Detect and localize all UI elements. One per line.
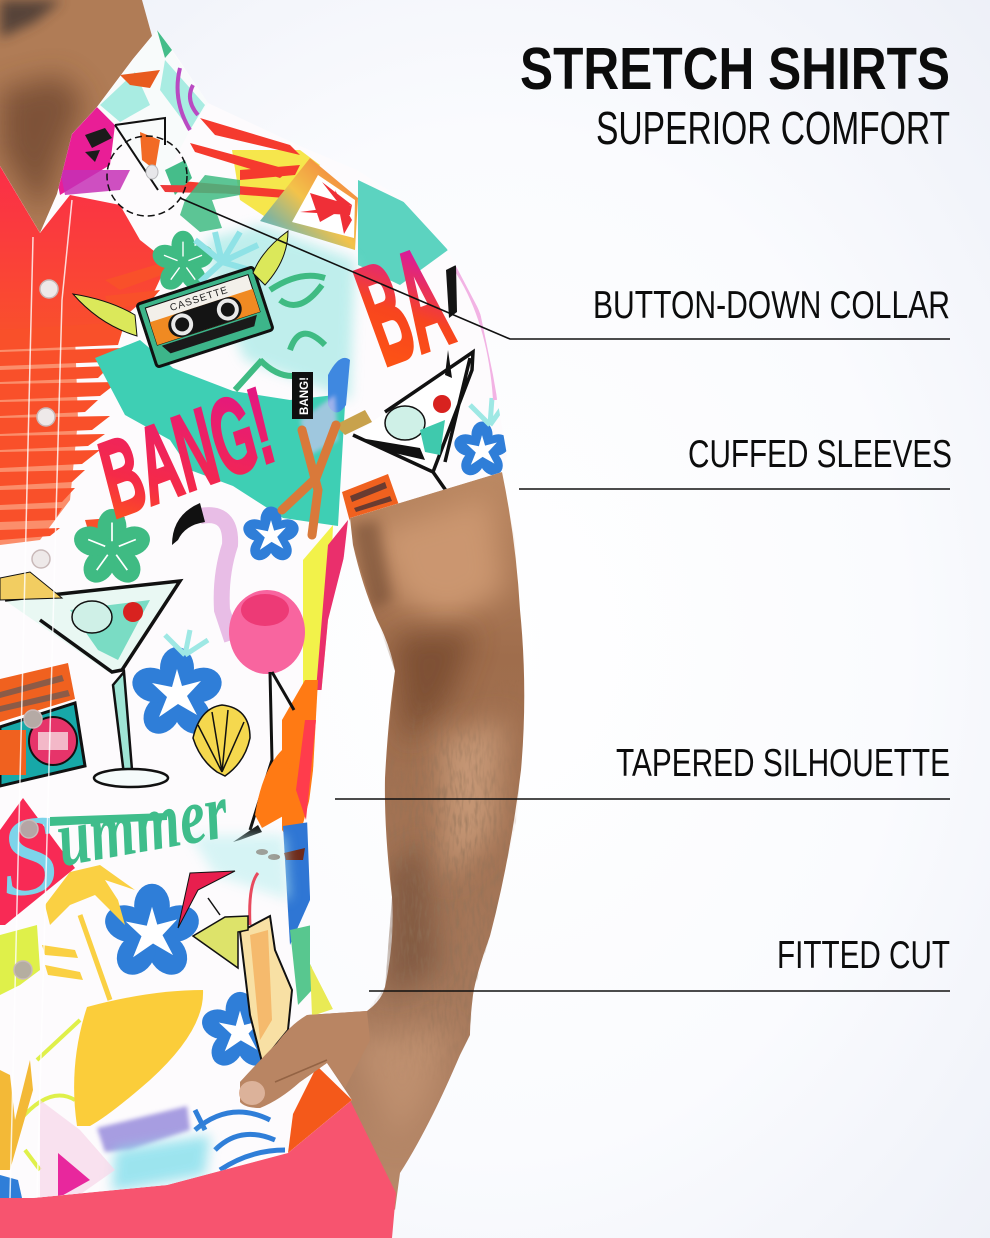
lavender wash — [300, 395, 338, 455]
red-orange brush stripes — [0, 262, 170, 540]
flamingo on sleeve — [446, 265, 495, 400]
cassette tape — [137, 267, 273, 367]
green outline leaves — [235, 276, 325, 390]
orange flamingo leaves — [255, 750, 282, 828]
watercolor hem — [0, 1100, 210, 1198]
shirt — [0, 30, 513, 1198]
black brand tag — [292, 372, 313, 419]
summer script: ummer — [50, 767, 235, 884]
striped side seam — [316, 520, 348, 690]
cassette tape: CASSETTE — [169, 285, 230, 314]
red-orange brush block — [0, 335, 78, 545]
dashed collar callout circle — [107, 136, 187, 216]
tropical drink — [193, 873, 292, 1062]
neck and chin — [0, 0, 152, 233]
red cocktail umbrella — [178, 871, 235, 928]
aqua palm burst — [195, 232, 258, 282]
orange rect radio on sleeve — [342, 474, 400, 522]
blue hibiscus — [100, 421, 513, 1072]
cassette wings — [73, 231, 288, 336]
thumb over shirt — [239, 1011, 370, 1108]
side lime tail — [310, 964, 333, 1016]
placket stitching — [10, 200, 72, 1198]
orange shirt tail — [288, 1066, 352, 1153]
flamingo — [172, 503, 305, 842]
pants — [0, 1100, 396, 1238]
aqua wash around summer — [190, 835, 290, 900]
red triangle — [0, 798, 75, 925]
boombox — [0, 663, 85, 786]
martini on chest — [0, 572, 180, 787]
aqua sprays — [165, 398, 502, 655]
yellow side panel — [303, 525, 333, 690]
sketch blue flower at hem — [195, 1110, 285, 1170]
summer script — [0, 767, 235, 922]
buttons — [14, 280, 58, 979]
teal brush area — [95, 340, 345, 526]
sleeve teal panel — [358, 180, 448, 285]
surfboard — [74, 990, 203, 1126]
green hibiscus — [70, 175, 240, 589]
callout: button-down collar — [180, 198, 950, 339]
aqua chest wash — [205, 225, 355, 400]
starfish — [282, 425, 336, 535]
BANG! chest lettering: BANG! — [82, 366, 289, 540]
sleeve BA letters: BA — [340, 219, 468, 395]
arm and hand — [240, 472, 530, 1210]
rainbow square panel — [260, 158, 358, 250]
orange side panel — [282, 680, 318, 832]
black brand tag: BANG! — [297, 377, 311, 415]
red chest panel — [0, 166, 161, 330]
yellow and red shoulder strokes — [184, 118, 320, 216]
palm tree — [42, 865, 135, 1000]
collar — [57, 30, 245, 195]
lime bikini girl — [0, 925, 80, 1170]
blue right edge blob — [328, 358, 350, 412]
martini on sleeve — [335, 350, 473, 492]
lower side blue — [283, 822, 310, 945]
seashell — [193, 705, 250, 776]
